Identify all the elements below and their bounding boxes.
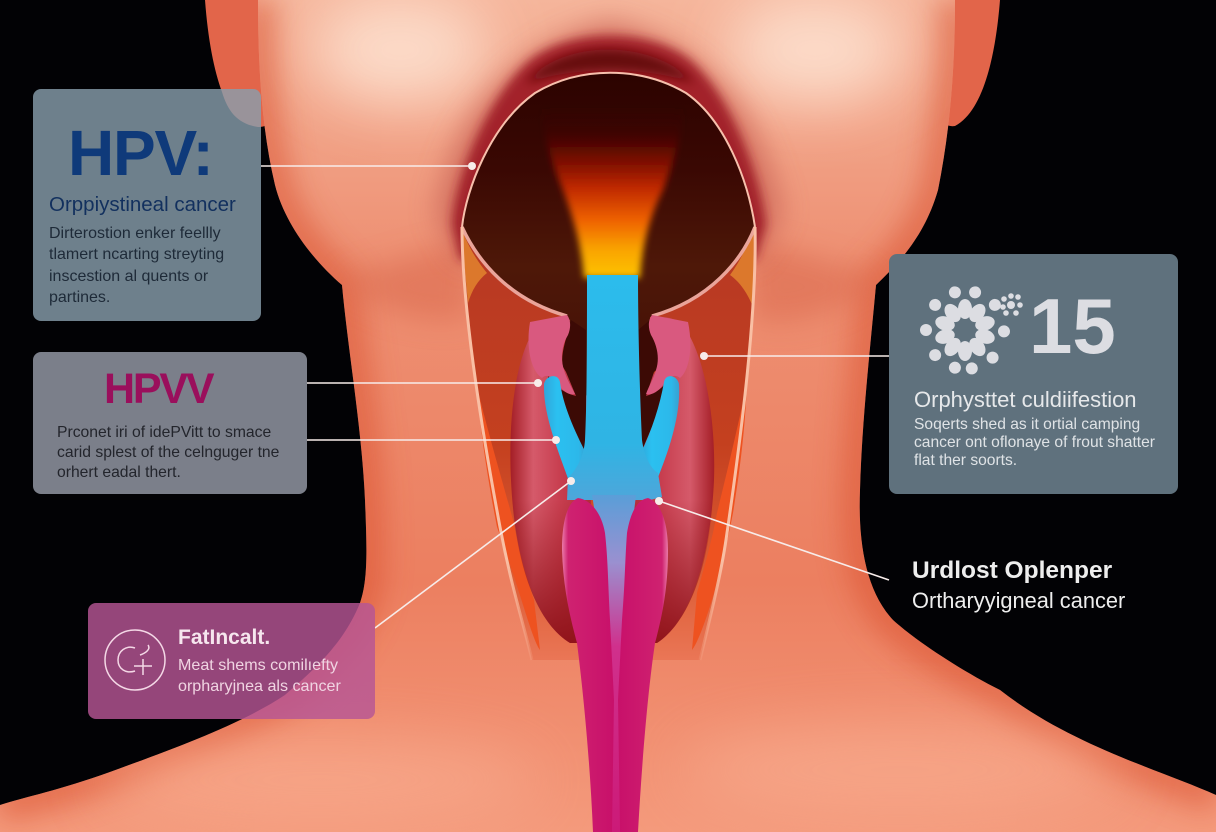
face highlight right	[725, 0, 905, 105]
left ear	[205, 0, 274, 127]
heading: HPV: HPV:	[68, 117, 213, 189]
throat wall outline right	[700, 227, 755, 660]
body text: partines.	[49, 289, 110, 306]
inner throat wall	[462, 227, 755, 660]
heading: Urdlost Oplenper	[912, 557, 1112, 584]
dark gap beside trunk right	[638, 320, 672, 455]
lips soft glow	[436, 22, 782, 260]
lips red ring	[452, 36, 766, 260]
heading: FatIncalt.	[178, 626, 270, 649]
subheading: Ortharyyigneal cancer	[912, 588, 1125, 613]
ridge highlight right	[652, 227, 755, 316]
body text: orpharyjnea als cancer	[178, 677, 341, 695]
body text	[57, 424, 279, 481]
blue to violet stem	[592, 495, 636, 832]
statistic number: 15	[1029, 282, 1116, 370]
mouth rim highlight	[462, 73, 755, 227]
neck shadow under jaw right	[754, 244, 858, 325]
body text: orhert eadal thert.	[57, 464, 181, 481]
body text: Prconet iri of idePVitt to smace	[57, 424, 271, 441]
neck shadow under jaw left	[360, 245, 466, 323]
lower neck tone right	[680, 725, 1120, 815]
pink rim left	[528, 315, 575, 394]
blue airway trunk	[567, 275, 662, 500]
body text	[49, 225, 224, 306]
panel: statistic 15	[889, 254, 1178, 494]
ridge highlight left	[462, 227, 567, 316]
dark lip band	[525, 50, 695, 84]
face highlight left	[310, 0, 490, 105]
lower neck tone left	[100, 740, 540, 820]
blue airway right branch	[640, 376, 679, 480]
red lobe left	[510, 317, 592, 643]
throat wall outline left	[462, 227, 532, 660]
heading: HPVV: HPVV	[104, 365, 212, 413]
orange band left	[477, 387, 540, 650]
flame-coloured pharynx	[541, 105, 684, 278]
orange band right	[692, 383, 747, 650]
body text: inscestion al quents or	[49, 268, 208, 285]
body text	[914, 416, 1155, 469]
body text: Dirterostion enker feellly	[49, 225, 221, 242]
body text: tlamert ncarting streyting	[49, 246, 224, 263]
panel: HPV definition	[33, 89, 261, 321]
subheading: Orppiystineal cancer	[49, 193, 236, 216]
body text: Soqerts shed as it ortial camping	[914, 416, 1140, 433]
body text	[178, 656, 341, 695]
blue airway left branch	[544, 376, 587, 484]
right ear	[936, 0, 1000, 126]
pink rim right	[646, 315, 690, 394]
pink epiglottis right	[618, 498, 668, 832]
callout: unboxed label	[912, 557, 1125, 613]
red lobe right	[628, 317, 714, 643]
lobe bottom shading left	[512, 500, 592, 643]
body text: carid splest of the celnguger tne	[57, 444, 279, 461]
orange tissue left	[461, 228, 487, 303]
orange tissue right	[730, 227, 754, 307]
body text: cancer ont oflonaye of frout shatter	[914, 434, 1155, 451]
panel: fact callout	[88, 603, 375, 719]
leader dots	[468, 162, 708, 505]
mouth and pharynx dark cavity	[462, 73, 755, 460]
icon: circled symbol	[104, 629, 166, 691]
icon: virus cluster	[920, 286, 1023, 374]
dark gap beside trunk	[548, 320, 586, 455]
body text: Meat shems comilıefty	[178, 656, 338, 674]
leader lines	[261, 166, 889, 628]
pink epiglottis left	[562, 498, 614, 832]
panel: HPVV	[33, 352, 307, 494]
lobe bottom shading right	[628, 500, 713, 643]
body text: flat ther soorts.	[914, 452, 1017, 469]
subheading: Orphysttet culdiifestion	[914, 387, 1137, 412]
